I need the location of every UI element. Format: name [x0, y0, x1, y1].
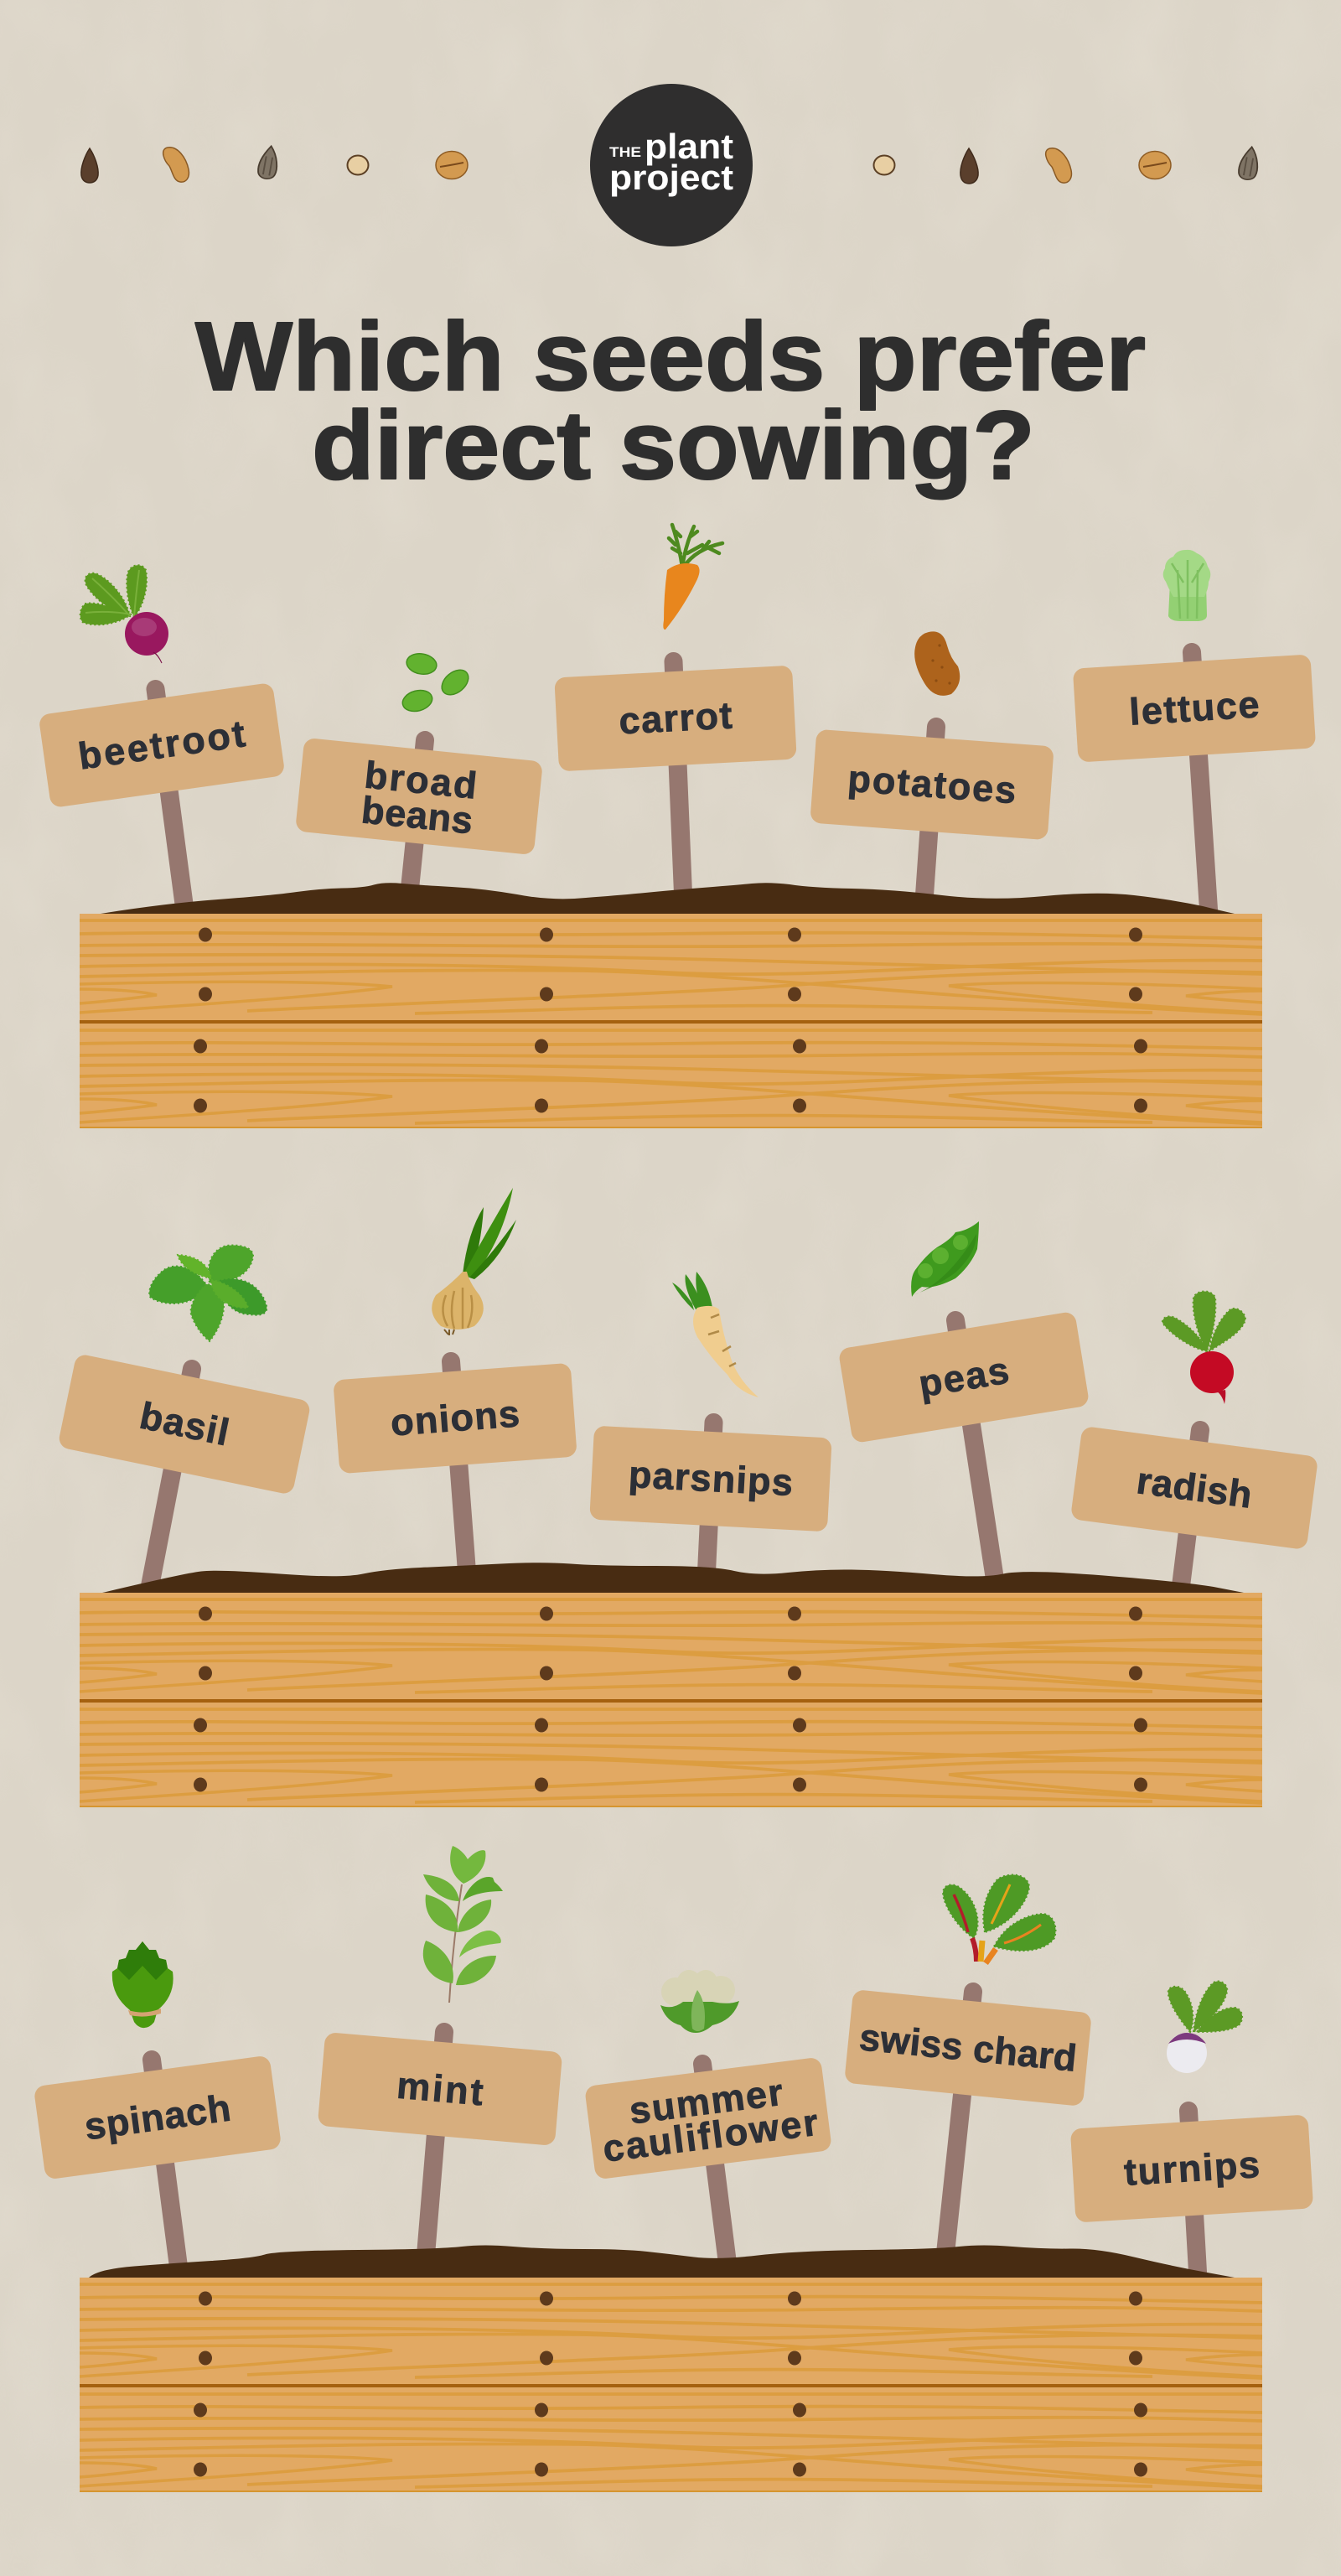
icon: parsnip: [672, 1272, 759, 1397]
soil: [102, 1563, 1244, 1594]
icon: spinach: [112, 1941, 173, 2028]
icon: striped seed: [1237, 145, 1261, 181]
icon: beetroot: [80, 565, 168, 663]
sign: onions: [333, 1363, 577, 1474]
wood box: [80, 914, 1262, 1128]
icon: onion: [432, 1188, 516, 1335]
marker: radish: [1070, 1291, 1318, 1586]
sign: broad beans: broad: [363, 753, 479, 807]
soil: [101, 883, 1235, 915]
marker: parsnips: [589, 1272, 832, 1572]
icon: dark seed: [81, 148, 98, 183]
planter 3: [80, 2245, 1262, 2492]
logo: plant: [645, 127, 733, 166]
marker: mint: [318, 1846, 562, 2255]
row 3 markers: [34, 1846, 1313, 2272]
icon: pale seed: [347, 156, 369, 174]
icon: dark seed: [960, 148, 978, 184]
sign: beetroot: beetroot: [75, 712, 248, 778]
icon: swiss chard: [943, 1875, 1055, 1963]
sign: potatoes: [810, 729, 1054, 840]
planter 1: [80, 883, 1262, 1128]
marker: beetroot: [39, 565, 285, 907]
sign: summer cauliflower: summer: [627, 2071, 785, 2132]
sign: broad beans: [295, 738, 543, 855]
sign: peas: [838, 1311, 1090, 1443]
icon: carrot: [663, 525, 722, 630]
sign: turnips: [1070, 2114, 1313, 2223]
sign: mint: mint: [396, 2064, 485, 2113]
icon: lettuce: [1163, 550, 1210, 621]
icon: broad beans: [401, 651, 474, 714]
icon: pale seed: [873, 156, 895, 174]
icon: pea pod: [911, 1221, 979, 1297]
sign: basil: basil: [137, 1394, 233, 1454]
icon: turnip: [1167, 1981, 1242, 2073]
sign: radish: [1070, 1426, 1318, 1550]
icon: striped seed: [256, 144, 280, 180]
sign: parsnips: parsnips: [628, 1453, 794, 1504]
marker: potatoes: [810, 631, 1054, 895]
seed row: right: [873, 145, 1261, 184]
icon: tan bean: [163, 148, 189, 182]
marker: turnips: [1070, 1981, 1313, 2272]
sign: mint: [318, 2032, 562, 2146]
marker: swiss chard: [844, 1875, 1092, 2253]
logo: [590, 84, 753, 246]
seed row: left: [81, 144, 468, 183]
row 2 markers: [57, 1188, 1318, 1586]
icon: mint: [423, 1846, 503, 2003]
icon: cauliflower: [660, 1970, 739, 2033]
icon: radish: [1162, 1291, 1245, 1404]
sign: beetroot: [39, 682, 285, 808]
sign: carrot: [554, 666, 797, 771]
marker: peas: [838, 1221, 1090, 1579]
icon: potato: [914, 631, 960, 696]
sign: broad beans: beans: [360, 788, 474, 842]
title: Which seeds prefer: [195, 302, 1146, 411]
sign: lettuce: [1073, 654, 1316, 763]
marker: summer cauliflower: [584, 1970, 832, 2263]
soil: [89, 2245, 1235, 2279]
marker: basil: [57, 1246, 312, 1586]
title: direct sowing?: [312, 391, 1035, 500]
icon: basil: [149, 1246, 267, 1341]
marker: spinach: [34, 1941, 282, 2267]
marker: lettuce: [1073, 550, 1316, 910]
marker: carrot: [554, 525, 797, 894]
icon: round tan seed: [436, 151, 468, 179]
sign: swiss chard: swiss chard: [857, 2015, 1079, 2080]
title: [195, 302, 1146, 500]
sign: radish: radish: [1134, 1459, 1255, 1516]
marker: broad beans: [295, 651, 543, 889]
icon: round tan seed: [1139, 151, 1171, 179]
planter 2: [80, 1563, 1262, 1807]
sign: onions: onions: [389, 1392, 521, 1444]
sign: summer cauliflower: [584, 2057, 832, 2179]
sign: spinach: spinach: [82, 2086, 233, 2148]
sign: carrot: carrot: [618, 694, 733, 742]
sign: parsnips: [589, 1426, 832, 1532]
wood box: [80, 2278, 1262, 2492]
sign: potatoes: potatoes: [847, 757, 1017, 811]
logo: THE: [609, 144, 641, 160]
row 1 markers: [39, 525, 1316, 910]
logo: project: [609, 158, 733, 197]
sign: swiss chard: [844, 1989, 1092, 2107]
wood box: [80, 1593, 1262, 1807]
sign: lettuce: lettuce: [1128, 682, 1261, 733]
icon: tan bean: [1046, 148, 1071, 183]
sign: peas: peas: [916, 1349, 1012, 1405]
sign: turnips: turnips: [1123, 2143, 1261, 2194]
sign: spinach: [34, 2055, 282, 2180]
sign: basil: [57, 1353, 312, 1495]
sign: summer cauliflower: cauliflower: [600, 2101, 821, 2170]
marker: onions: [333, 1188, 577, 1572]
